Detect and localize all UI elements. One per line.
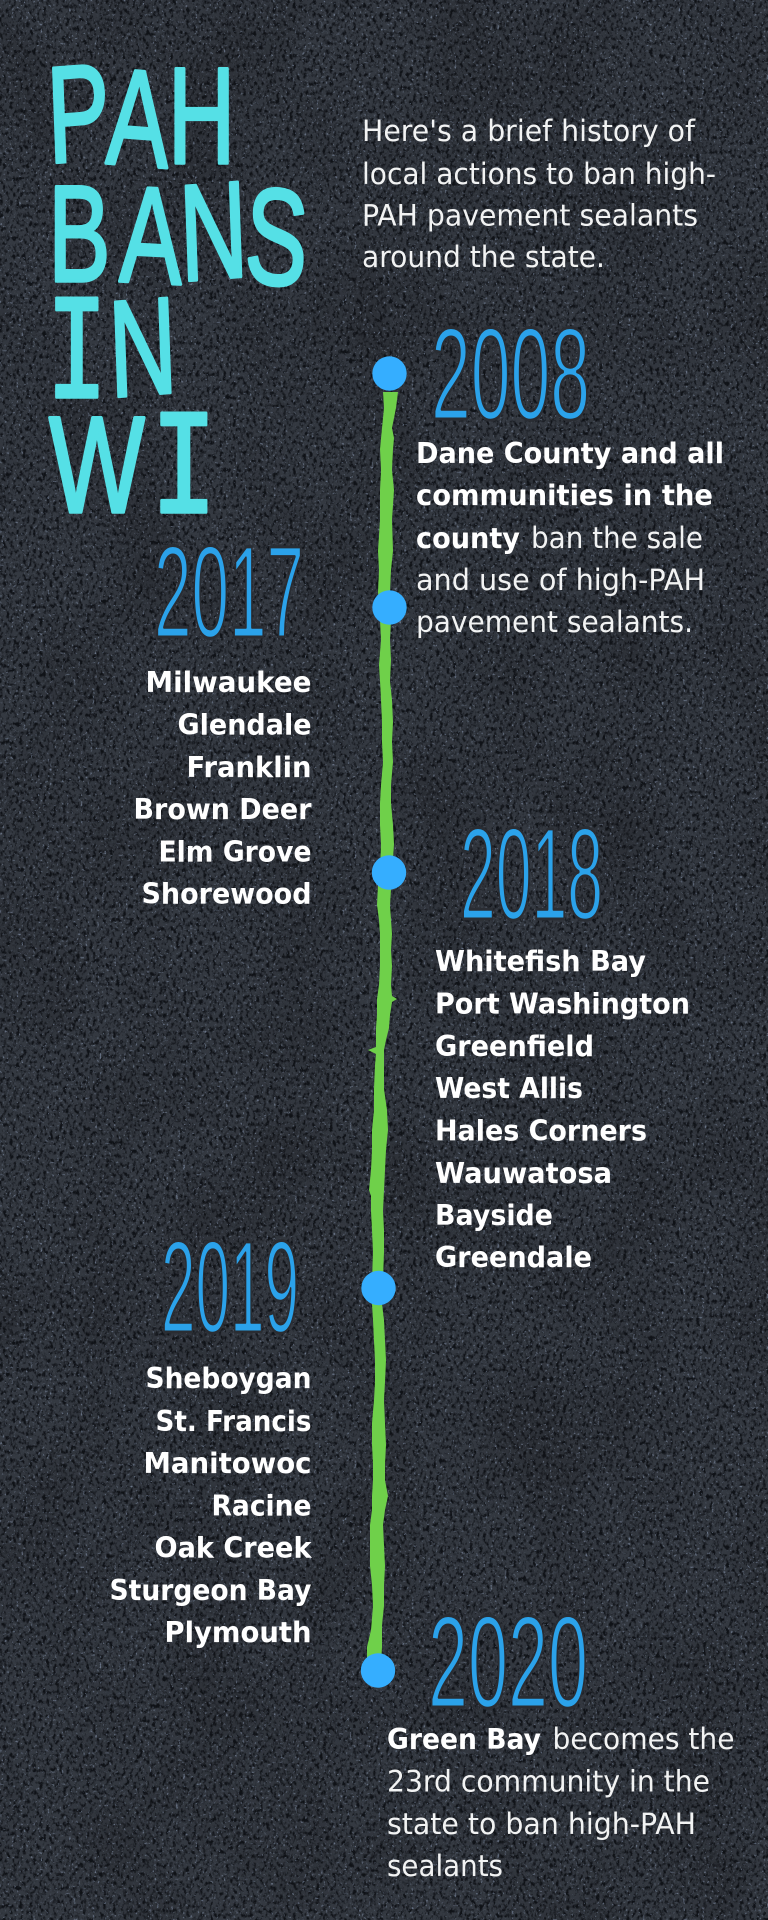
year 2017: 2017 (154, 518, 304, 665)
intro text: local actions to ban high- (362, 157, 716, 191)
list: 2019 communities: Plymouth (164, 1616, 312, 1649)
text: 2008 description (416, 437, 724, 639)
list: 2018 communities: Hales Corners (435, 1114, 647, 1148)
text: 2008 description: communities in the (416, 479, 713, 512)
list: 2018 communities (435, 945, 690, 1274)
dot: 2019 (361, 1271, 396, 1305)
text: 2020 description (387, 1722, 734, 1883)
list: 2017 communities: Brown Deer (134, 793, 312, 826)
list: 2019 communities (110, 1362, 312, 1649)
text: 2008 description: Dane County and all (416, 437, 724, 470)
panel: 2008 (416, 300, 724, 639)
text: 2008 description: pavement sealants. (416, 605, 693, 639)
title: PAH BANS IN WI (45, 34, 311, 557)
list: 2019 communities: St. Francis (156, 1405, 312, 1438)
panel: 2017 (134, 518, 312, 910)
intro text (362, 114, 716, 274)
title: PAH BANS IN WI: WI (49, 387, 217, 557)
text: 2020 description: 23rd community in the (387, 1764, 710, 1798)
text: 2020 description: sealants (387, 1849, 503, 1883)
list: 2018 communities: Greenfield (435, 1030, 594, 1063)
dot: 2020 (361, 1653, 395, 1688)
list: 2018 communities: Bayside (435, 1199, 553, 1232)
year 2020: 2020 (428, 1588, 588, 1735)
panel: 2018: 2018 (460, 800, 603, 947)
title: PAH BANS IN WI: PAH (45, 34, 235, 197)
text: 2008 description: and use of high-PAH (416, 563, 705, 597)
list: 2017 communities: Franklin (186, 751, 312, 784)
intro text: PAH pavement sealants (362, 198, 698, 232)
title: PAH BANS IN WI: BANS (48, 152, 311, 317)
list: 2019 communities: Manitowoc (144, 1447, 312, 1480)
panel: 2019: 2019 (161, 1213, 299, 1360)
list: 2019 communities: Sheboygan (146, 1362, 312, 1395)
panel: 2020 (387, 1588, 734, 1883)
text: 2020 description: state to ban high-PAH (387, 1807, 696, 1841)
panel: 2018 (435, 800, 690, 1274)
text: 2020 description: Green Bay (387, 1723, 541, 1756)
intro text: around the state. (362, 240, 605, 274)
list: 2018 communities: West Allis (435, 1072, 583, 1105)
panel: 2019 (110, 1213, 312, 1649)
intro text: Here's a brief history of (362, 114, 696, 148)
green hand-drawn line (367, 392, 398, 1665)
list: 2019 communities: Sturgeon Bay (110, 1574, 312, 1607)
list: 2017 communities: Elm Grove (158, 836, 312, 868)
dot: 2008 (372, 356, 407, 391)
text: 2020 description: becomes the (552, 1722, 734, 1756)
list: 2018 communities: Whitefish Bay (435, 945, 646, 978)
list: 2019 communities: Oak Creek (154, 1532, 312, 1564)
list: 2019 communities: Racine (212, 1490, 312, 1522)
list: 2018 communities: Port Washington (435, 988, 690, 1020)
list: 2017 communities: Shorewood (142, 878, 312, 910)
text: 2008 description: county (416, 522, 520, 555)
dot: 2018 (372, 855, 406, 890)
dot: 2017 (372, 590, 407, 625)
list: 2017 communities: Milwaukee (146, 666, 312, 699)
list: 2017 communities (134, 666, 312, 910)
list: 2018 communities: Wauwatosa (435, 1157, 612, 1190)
title: PAH BANS IN WI: IN (46, 268, 179, 443)
list: 2017 communities: Glendale (178, 708, 312, 742)
text: 2008 description: ban the sale (531, 521, 703, 555)
year 2008: 2008 (431, 300, 590, 447)
list: 2018 communities: Greendale (435, 1241, 592, 1274)
timeline: green line with dots (361, 356, 407, 1688)
